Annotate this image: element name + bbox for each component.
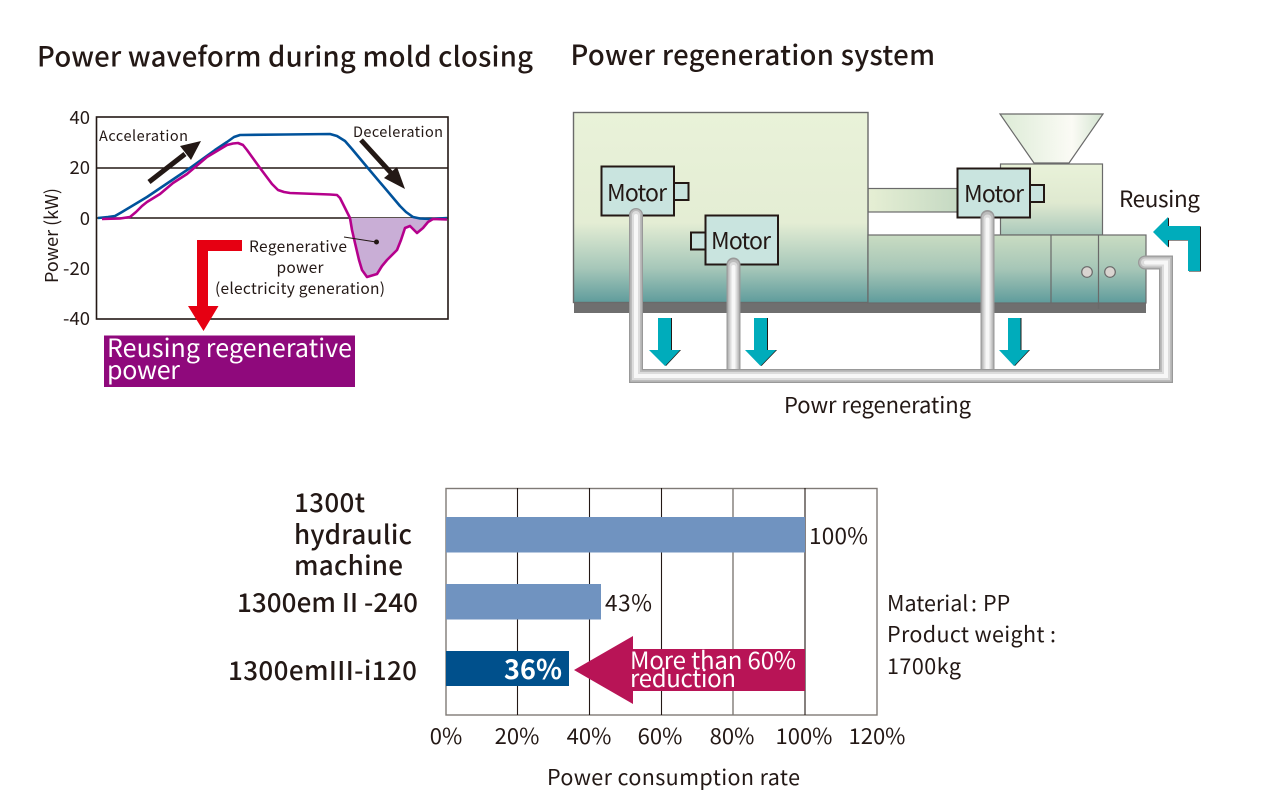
x axis labels: 100% (776, 719, 832, 751)
bar: 1300t hydraulic machine (446, 517, 805, 552)
callout: reusing regenerative power: Reusing regenerative (107, 329, 352, 365)
y axis labels: 40 (69, 104, 90, 130)
motor 1 (602, 166, 688, 216)
plot frame (96, 117, 448, 319)
arrow: more than 60% reduction: reduction (630, 659, 736, 694)
label: regenerative power: power (276, 256, 324, 278)
category label: 1300em III-i120: 1300emIII-i120 (228, 651, 417, 688)
value: 100%: 100% (809, 519, 868, 551)
bar chart: power consumption rate (228, 483, 905, 792)
diagram: injection molding machine (574, 112, 1201, 420)
x axis labels (430, 719, 905, 751)
note: material and product weight: PP (983, 587, 1010, 618)
arrow: red down (188, 240, 242, 331)
label: acceleration: Acceleration (99, 125, 188, 146)
y axis labels: 20 (69, 154, 90, 180)
label: regenerative power: Regenerative (249, 235, 347, 257)
upper barrel unit (1000, 164, 1102, 235)
motor 2: Motor (711, 222, 771, 256)
x axis labels: 60% (638, 719, 682, 751)
category label: 1300t hydraulic machine: 1300t (294, 483, 365, 520)
value: 36%: 36% (504, 648, 562, 687)
note: material and product weight: 1700kg (887, 650, 961, 681)
arrow: acceleration (149, 141, 201, 182)
title: power regeneration system: Power regeneration system (570, 33, 935, 73)
category label: 1300t hydraulic machine: machine (294, 546, 403, 583)
category label: 1300t hydraulic machine (294, 483, 412, 583)
y axis labels: -20 (63, 255, 90, 281)
label: regenerative power (215, 235, 385, 299)
arrow: regenerating 2 (745, 318, 777, 366)
chart: power waveform (38, 104, 448, 331)
arrow: regenerating 1 (649, 318, 681, 366)
power pipes (636, 215, 1166, 376)
x axis labels: 80% (710, 719, 754, 751)
x axis labels: 0% (430, 719, 462, 751)
label: deceleration: Deceleration (353, 121, 443, 142)
arrow: reusing (1153, 217, 1201, 272)
category label: 1300t hydraulic machine: hydraulic (294, 515, 412, 552)
x axis labels: 40% (567, 719, 611, 751)
connecting rod (868, 188, 958, 212)
magenta power curve (102, 143, 447, 277)
knobs (1082, 267, 1115, 277)
y axis labels: 0 (80, 205, 90, 231)
y axis labels (63, 104, 90, 331)
callout: reusing regenerative power: power (107, 351, 180, 387)
arrow: more than 60% reduction: More than 60% (630, 641, 796, 676)
note: material and product weight: : (971, 587, 977, 618)
main clamp unit (574, 112, 868, 302)
machine base (574, 302, 1146, 313)
motor 3 (958, 168, 1044, 218)
arrow: regenerating 3 (999, 318, 1030, 366)
motor 3: Motor (964, 175, 1024, 209)
label: regenerative power: (electricity generation) (215, 277, 385, 299)
label: reusing: Reusing (1119, 182, 1200, 214)
x axis labels: 120% (849, 719, 905, 751)
note: material and product weight: Product weight : (887, 618, 1056, 649)
bar: 1300em II-240 (446, 584, 601, 620)
motor 1: Motor (607, 174, 667, 208)
label: power regenerating: Powr regenerating (784, 388, 972, 420)
plot frame and grid (446, 488, 877, 715)
y axis labels: -40 (63, 305, 90, 331)
title: power waveform: Power waveform during mold closing (37, 34, 533, 74)
bar: 1300em III-i120 (446, 651, 569, 686)
category label: 1300em II-240: 1300em II -240 (237, 583, 418, 620)
regenerative power area (350, 218, 433, 277)
blue power curve (98, 134, 447, 219)
motor 2 (691, 216, 778, 264)
hopper (1000, 114, 1103, 163)
x axis title: Power consumption rate (547, 761, 800, 792)
note: material and product weight: Material (887, 587, 968, 618)
leader line (344, 237, 379, 244)
injection unit (868, 235, 1146, 303)
callout: reusing regenerative power (104, 329, 355, 387)
value: 43%: 43% (605, 586, 652, 618)
x axis labels: 20% (495, 719, 539, 751)
arrow: more than 60% reduction (574, 636, 805, 704)
arrow: deceleration (361, 140, 405, 189)
y axis title: Power (kW) (38, 188, 64, 283)
note: material and product weight (887, 587, 1056, 681)
